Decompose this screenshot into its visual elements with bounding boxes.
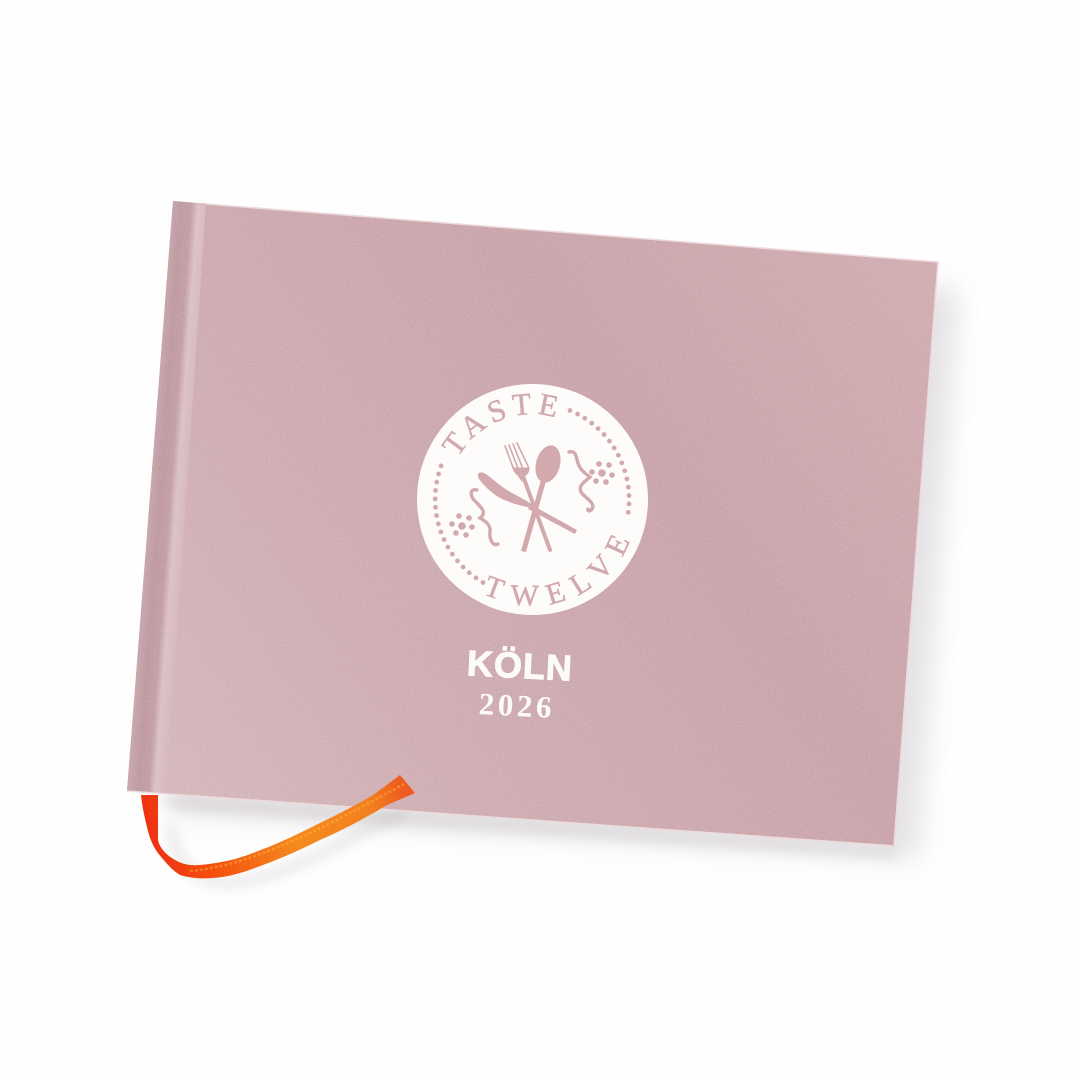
year: 2026: 2026 xyxy=(478,686,556,725)
book shadow xyxy=(160,240,958,858)
dotted ring: right xyxy=(570,410,629,517)
spine hinge xyxy=(127,201,206,794)
icon: left grape cluster xyxy=(449,513,475,538)
icon: right grape cluster xyxy=(589,461,615,485)
ribbon shadow xyxy=(170,812,405,883)
logo badge xyxy=(417,384,648,615)
icon: left ribbon flourish xyxy=(471,490,498,545)
TWELVE arc text: TWELVE xyxy=(486,534,630,606)
icon: spoon xyxy=(521,443,565,552)
dotted ring: left xyxy=(435,460,483,582)
icon: knife xyxy=(478,472,577,534)
icon: right ribbon flourish xyxy=(569,452,593,511)
white disc xyxy=(417,384,648,615)
linen dark weave xyxy=(127,201,938,846)
cover board xyxy=(127,201,938,846)
icon: fork xyxy=(505,443,550,550)
ribbon bookmark xyxy=(141,775,415,878)
linen texture xyxy=(127,201,938,846)
cover edge highlights xyxy=(127,204,938,846)
title: KÖLN: KÖLN xyxy=(466,642,574,689)
book cover xyxy=(127,201,938,846)
TASTE arc text: TASTE xyxy=(441,393,558,454)
